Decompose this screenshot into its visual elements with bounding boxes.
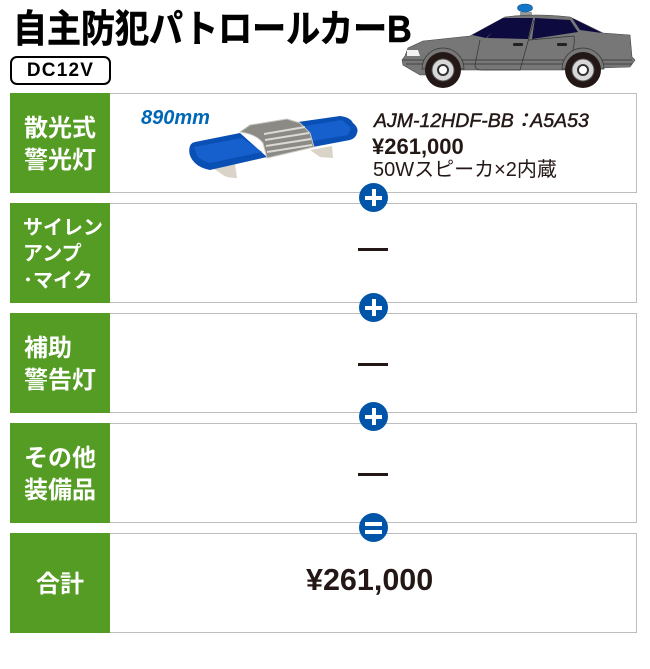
row: siren amp and mic (10, 203, 637, 303)
plus icon 1 (359, 183, 388, 212)
label: other equipment: その他 (24, 444, 96, 472)
label: auxiliary light: 補助 (24, 334, 72, 362)
product image: light bar (189, 116, 358, 178)
illustration: patrol car (402, 4, 636, 88)
feet (213, 146, 333, 178)
label: total (10, 533, 110, 633)
label: total: 合計 (36, 570, 84, 598)
empty dash (358, 363, 388, 366)
label: siren amp: ･マイク (23, 270, 93, 292)
front wheel (422, 48, 464, 88)
voltage badge: DC12V (27, 60, 94, 81)
plus icon 2 (359, 293, 388, 322)
size text: 890mm (141, 107, 210, 129)
row: auxiliary light (10, 313, 637, 413)
label: siren amp: サイレン (23, 217, 103, 239)
empty dash (358, 473, 388, 476)
label: other equipment (10, 423, 110, 523)
center speaker (240, 119, 314, 158)
label: auxiliary light: 警告灯 (24, 366, 96, 394)
rear wheel (562, 48, 604, 88)
model number: AJM-12HDF-BB：A5A53 (374, 110, 589, 132)
empty dash (358, 248, 388, 251)
beacon light (518, 4, 532, 16)
price: ¥261,000 (372, 134, 464, 159)
car body (402, 15, 635, 75)
row: total (10, 533, 637, 633)
label: light bar (10, 93, 110, 193)
speaker spec: 50Wスピーカ×2内蔵 (373, 159, 557, 181)
title: 自主防犯パトロールカーB (13, 9, 412, 51)
label: other equipment: 装備品 (24, 476, 96, 504)
total price: ¥261,000 (306, 563, 433, 597)
blue lenses (189, 116, 358, 170)
label: light bar: 散光式 (24, 114, 96, 142)
row: light bar (10, 93, 637, 193)
label: auxiliary light (10, 313, 110, 413)
equals icon (359, 513, 388, 542)
label: siren amp: アンプ (23, 243, 82, 265)
plus icon 3 (359, 402, 388, 431)
label: light bar: 警光灯 (24, 146, 96, 174)
voltage badge (10, 56, 111, 85)
row: other equipment (10, 423, 637, 523)
label: siren amp (10, 203, 110, 303)
